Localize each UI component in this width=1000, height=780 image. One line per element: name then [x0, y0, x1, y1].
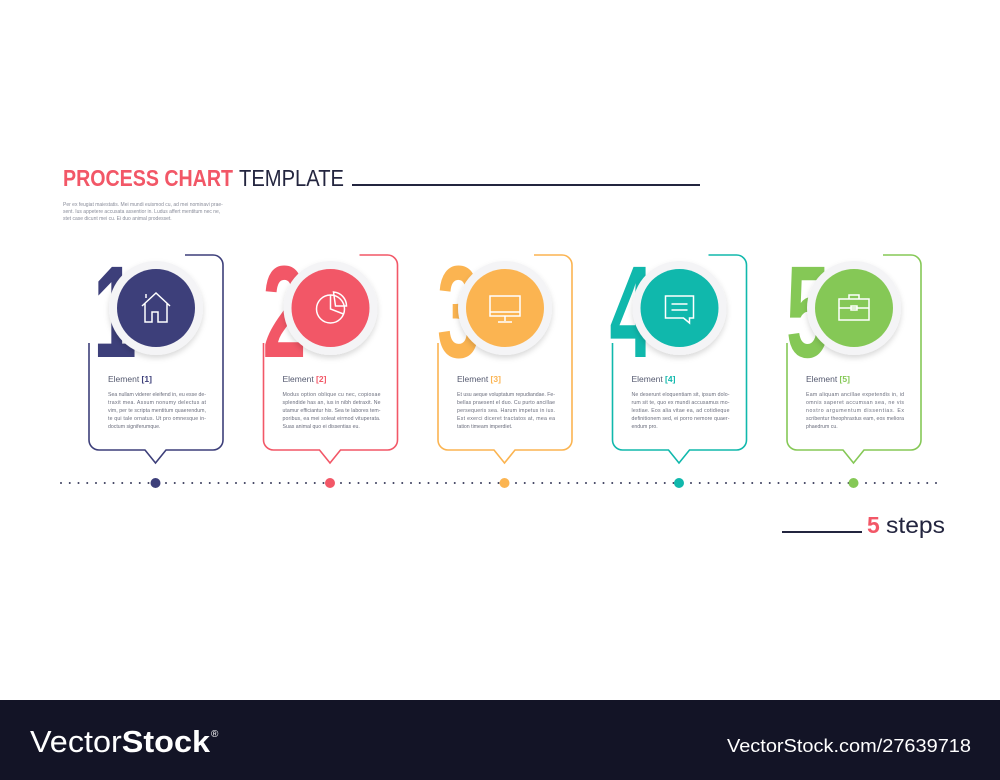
card 1: traxit mea. Assum nonumy delectus at	[108, 400, 207, 406]
card 2	[262, 238, 398, 463]
steps label: steps	[886, 512, 945, 538]
card 3: bellas praesent el duo. Cu purto ancillae	[457, 400, 555, 406]
description text	[63, 202, 223, 222]
title: TEMPLATE	[239, 165, 344, 191]
card 5: phaedrum cu.	[806, 424, 838, 430]
card 4	[610, 238, 746, 463]
card 4: endum pro.	[632, 424, 658, 430]
icon: chat	[666, 296, 694, 323]
card 3: 3	[437, 238, 481, 385]
card 5: omnis saperet accumsan sea, ne vis	[806, 400, 904, 406]
card 1: doctum signiferumque.	[108, 424, 160, 430]
card 5: Element [5]	[806, 374, 850, 384]
description text: stet case dicunt mei cu. Ei duo animal prodesset.	[63, 216, 172, 222]
card 2: Modus option oblique cu nec, copiosae	[282, 392, 381, 398]
card 3: tation timeam imperdiet.	[457, 424, 512, 430]
card 1: te qui tale ornatus. Ut pro omnesque in-	[108, 416, 206, 422]
icon: pie chart	[316, 292, 347, 323]
card 5: nostro argumentum dissentias. Ex	[806, 408, 904, 414]
card 3: persequeris sea. Harum impetus in ius.	[457, 408, 555, 414]
card 1	[89, 238, 223, 463]
card 2: Suas animal quo ei dissentias eu.	[282, 424, 360, 430]
card 3: Element [3]	[457, 374, 501, 384]
card 4: rum sit te, quo ex mundi accusamus mo-	[632, 400, 730, 406]
description text: Per ex feugiat maiestatis. Mei mundi euismod cu, ad mei nominavi prae-	[63, 202, 223, 208]
card 2: poribus, ea mei soleat eirmod vituperata.	[282, 416, 380, 422]
icon: briefcase	[839, 295, 869, 320]
card 5: scribentur theophrastus eam, eos meliora	[806, 416, 904, 422]
steps label	[782, 512, 945, 538]
icon: monitor	[490, 296, 520, 322]
card 3: Est exerci diceret tractatos at, mea ea	[457, 416, 555, 422]
card 2: utamur efficiantur his. Sea te labores tem-	[282, 408, 381, 414]
card 1: 1	[93, 238, 137, 385]
card 1: Element [1]	[108, 374, 152, 384]
icon: house	[142, 293, 170, 322]
footer: ®	[211, 729, 219, 740]
title: PROCESS CHART	[63, 165, 233, 191]
description text: sent. Ius appetere accusata assentior in. Ludus affert mentitum nec ne,	[63, 209, 220, 215]
card 5: Eam aliquam ancillae expetendis in, id	[806, 392, 904, 398]
card 4: definitionem sed, ei porro nemore quaer-	[632, 416, 730, 422]
title	[63, 165, 700, 191]
card 2: splendide has an, ius in nibh detraxit. Ne	[282, 400, 381, 406]
card 3: Et usu aeque voluptatum repudiandae. Fe-	[457, 392, 555, 398]
card 2: Element [2]	[282, 374, 327, 384]
card 2: 2	[262, 238, 306, 385]
card 5: 5	[786, 238, 830, 385]
card 4: 4	[610, 238, 653, 385]
footer: VectorStock	[30, 724, 211, 759]
footer	[0, 700, 1000, 780]
steps label: 5	[867, 512, 880, 538]
card 1: vim, per te scripta mentitum quaerendum,	[108, 408, 206, 414]
footer: VectorStock.com/27639718	[727, 736, 971, 756]
card 4: lestiae. Eos alia vitae ea, ad cotidieque	[632, 408, 730, 414]
card 4: Element [4]	[632, 374, 676, 384]
card 1: Sea nullam viderer eleifend in, eu esse de-	[108, 392, 206, 398]
card 4: Ne deserunt eloquentiam sit, ipsum dolo-	[632, 392, 730, 398]
card 3	[437, 238, 572, 463]
card 5	[786, 238, 921, 463]
dotted timeline	[61, 478, 940, 488]
